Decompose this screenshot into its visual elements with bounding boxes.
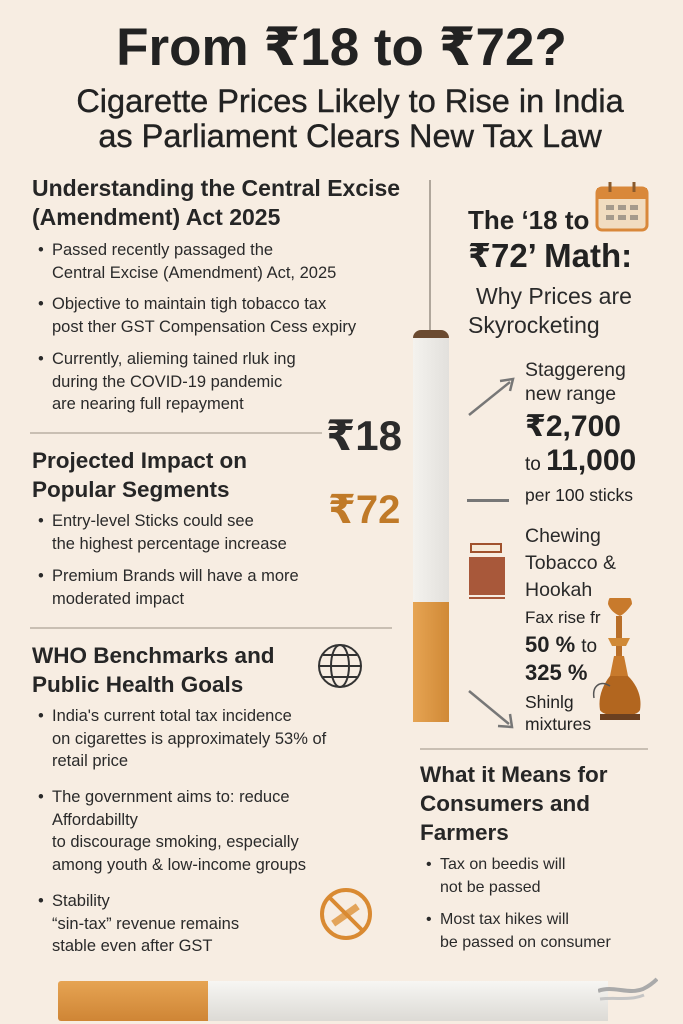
text: price range: new range bbox=[525, 383, 616, 405]
heading: math bbox=[468, 205, 632, 274]
subtitle bbox=[76, 83, 624, 154]
text: price range: Staggereng bbox=[525, 359, 626, 381]
heading: consumers: Farmers bbox=[420, 820, 509, 845]
bullets: WHO: to discourage smoking, especially bbox=[52, 833, 299, 851]
bullets: WHO: Stability bbox=[52, 892, 110, 910]
icon: no smoking bbox=[320, 888, 372, 940]
bullets: segments: the highest percentage increase bbox=[52, 534, 287, 552]
text: chewing tobacco: Hookah bbox=[525, 579, 592, 601]
bullets: segments: Premium Brands will have a more bbox=[52, 567, 299, 585]
text: price range: to 11,000 bbox=[525, 444, 636, 477]
subtitle: as Parliament Clears New Tax Law bbox=[98, 118, 602, 154]
divider short bbox=[467, 499, 509, 502]
subheading: Why Prices are bbox=[476, 283, 632, 309]
bullets: WHO: on cigarettes is approximately 53% of bbox=[52, 730, 326, 748]
bullets: excise act: are nearing full repayment bbox=[52, 395, 244, 413]
text: price range: per 100 sticks bbox=[525, 485, 633, 505]
bullets: excise act: Central Excise (Amendment) Act, 2025 bbox=[52, 264, 336, 282]
bullets: consumers: Most tax hikes will bbox=[440, 911, 569, 928]
subtitle: Cigarette Prices Likely to Rise in India bbox=[76, 83, 624, 119]
bullets: segments: moderated impact bbox=[52, 590, 184, 608]
bullets: excise act: post ther GST Compensation Cess expiry bbox=[52, 318, 356, 336]
bullets: WHO: retail price bbox=[52, 752, 128, 770]
bullets: WHO bbox=[38, 707, 326, 955]
price label ₹18: ₹18 bbox=[326, 412, 402, 459]
bullets: consumers bbox=[426, 856, 611, 950]
bullets: WHO: Affordabillty bbox=[52, 810, 138, 828]
heading: consumers: What it Means for bbox=[420, 762, 608, 787]
heading: math: The ‘18 to bbox=[468, 205, 589, 235]
text: chewing tobacco: Chewing bbox=[525, 525, 601, 547]
icon: calendar bbox=[596, 182, 648, 232]
vertical guide line bbox=[429, 180, 430, 332]
bullets: consumers: not be passed bbox=[440, 878, 541, 896]
text: chewing tobacco: Tobacco & bbox=[525, 552, 616, 574]
icon: hookah bbox=[592, 598, 640, 720]
arrow: down bbox=[468, 690, 514, 728]
heading: consumers bbox=[420, 762, 608, 845]
bullets: segments bbox=[38, 512, 299, 608]
heading: excise act: Understanding the Central Excise bbox=[32, 175, 400, 201]
text: chewing tobacco: 325 % bbox=[525, 660, 587, 685]
heading: projected impact bbox=[32, 448, 247, 502]
title: From ₹18 to ₹72? bbox=[116, 18, 567, 77]
panel: consumers and farmers bbox=[420, 762, 611, 950]
bullets: WHO: among youth & low-income groups bbox=[52, 856, 306, 874]
text: chewing tobacco: mixtures bbox=[525, 714, 591, 734]
text: price range bbox=[525, 359, 636, 505]
bullets: WHO: stable even after GST bbox=[52, 937, 212, 955]
panel: excise act bbox=[32, 175, 400, 413]
text: price range: ₹2,700 bbox=[525, 410, 621, 443]
bullets: consumers: Tax on beedis will bbox=[440, 856, 565, 873]
heading: consumers: Consumers and bbox=[420, 791, 590, 816]
heading: projected impact: Popular Segments bbox=[32, 477, 230, 502]
subheading bbox=[468, 283, 632, 338]
bullets: excise act bbox=[38, 241, 356, 413]
heading: projected impact: Projected Impact on bbox=[32, 448, 247, 473]
panel: 18 to 72 math bbox=[468, 182, 648, 338]
heading: math: ₹72’ Math: bbox=[468, 237, 632, 274]
text: chewing tobacco: 50 % to bbox=[525, 632, 597, 657]
subheading: Skyrocketing bbox=[468, 312, 600, 338]
bullets: segments: Entry-level Sticks could see bbox=[52, 512, 254, 530]
heading: excise act: (Amendment) Act 2025 bbox=[32, 204, 280, 230]
text: chewing tobacco: Fax rise fr bbox=[525, 608, 601, 627]
icon: tobacco pack bbox=[469, 543, 505, 599]
bullets: WHO: “sin-tax” revenue remains bbox=[52, 914, 239, 932]
panel: projected impact bbox=[32, 448, 299, 608]
price label ₹72: ₹72 bbox=[328, 488, 400, 532]
cigarette: vertical bbox=[413, 330, 449, 722]
cigarette: horizontal bottom bbox=[58, 978, 658, 1021]
bullets: excise act: Currently, alieming tained rluk ing bbox=[52, 350, 296, 368]
bullets: excise act: Objective to maintain tigh tobacco tax bbox=[52, 295, 326, 313]
bullets: WHO: The government aims to: reduce bbox=[52, 788, 290, 806]
heading: excise act bbox=[32, 175, 400, 230]
bullets: consumers: be passed on consumer bbox=[440, 934, 611, 950]
bullets: WHO: India's current total tax incidence bbox=[52, 707, 292, 725]
heading: WHO bbox=[32, 643, 275, 697]
text: chewing tobacco: Shinlg bbox=[525, 692, 574, 712]
heading: WHO: WHO Benchmarks and bbox=[32, 643, 275, 668]
bullets: excise act: Passed recently passaged the bbox=[52, 241, 273, 259]
heading: WHO: Public Health Goals bbox=[32, 672, 243, 697]
icon: globe bbox=[318, 644, 362, 688]
bullets: excise act: during the COVID-19 pandemic bbox=[52, 372, 282, 390]
panel: WHO benchmarks bbox=[32, 643, 372, 955]
text: chewing tobacco bbox=[525, 525, 616, 734]
arrow: up bbox=[468, 378, 515, 416]
